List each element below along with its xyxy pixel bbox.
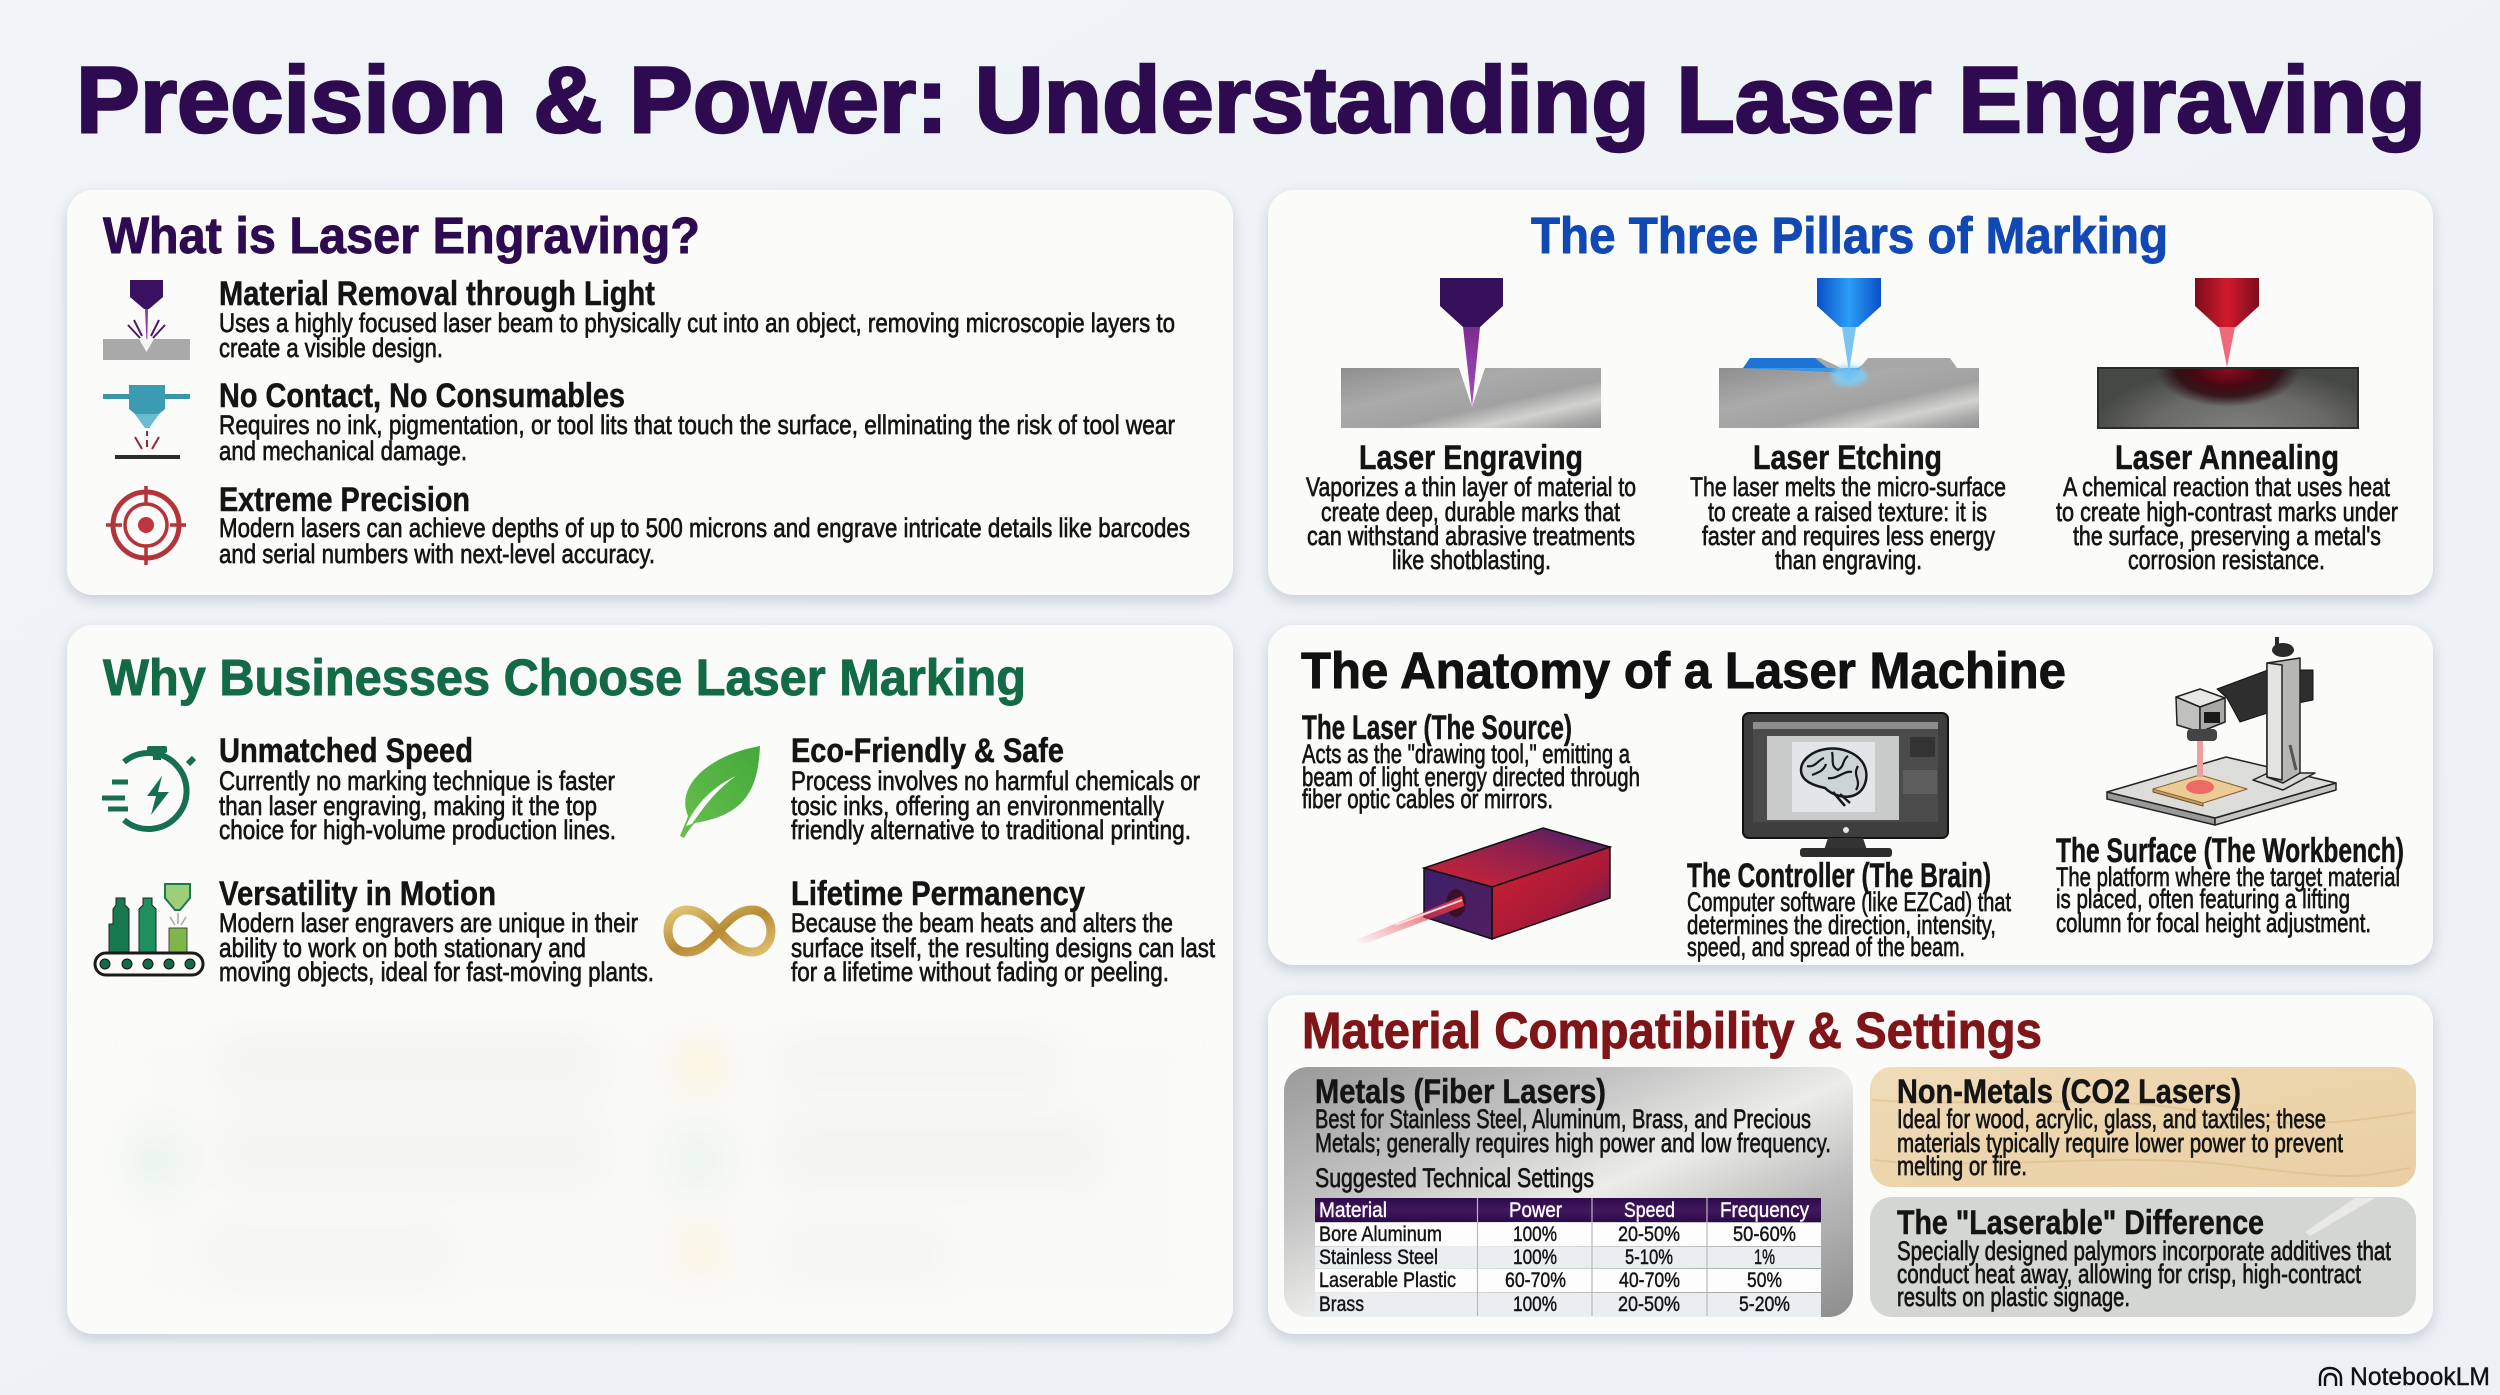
text: lifetime permanency — [791, 875, 1216, 987]
logo: NotebookLM: NotebookLM — [2350, 1363, 2490, 1391]
text: lifetime permanency: for a lifetime without fading or peeling. — [791, 957, 1169, 987]
text: versatility: moving objects, ideal for fast-moving plants. — [219, 957, 654, 987]
card: non-metals: Non-Metals (CO2 Lasers) — [1897, 1073, 2241, 1111]
text: laser etching: faster and requires less energy — [1702, 521, 1996, 551]
text: lifetime permanency: Because the beam heats and alters the — [791, 908, 1173, 938]
table: technical settings: 60-70% — [1505, 1269, 1566, 1292]
text: eco-friendly: tosic inks, offering an environmentally — [791, 791, 1165, 821]
text: versatility: Modern laser engravers are unique in their — [219, 908, 638, 938]
card: non-metals: Ideal for wood, acrylic, glass, and taxtiles; these — [1897, 1104, 2326, 1134]
text: laser etching: than engraving. — [1775, 545, 1922, 575]
text: metals description: Metals (Fiber Lasers) — [1315, 1073, 1606, 1111]
icon: laser source box — [1356, 828, 1610, 945]
panel: what is laser engraving — [67, 190, 1233, 595]
text: versatility — [219, 875, 654, 987]
text: eco-friendly — [791, 732, 1200, 845]
text: extreme precision: and serial numbers with next-level accuracy. — [219, 539, 655, 569]
text: unmatched speed: choice for high-volume production lines. — [219, 815, 616, 845]
card: non-metals — [1870, 1067, 2416, 1187]
panel: three pillars — [1268, 190, 2433, 595]
table: technical settings: 50-60% — [1733, 1223, 1796, 1246]
card: non-metals: melting or fire. — [1897, 1151, 2027, 1181]
text: the controller: The Controller (The Brain) — [1687, 857, 1991, 895]
text: the laser source: Acts as the "drawing tool," emitting a — [1302, 739, 1630, 769]
text: lifetime permanency: Lifetime Permanency — [791, 875, 1085, 913]
table: technical settings: Speed — [1624, 1199, 1675, 1222]
diagram: laser engraving — [1341, 278, 1601, 428]
table: technical settings: 20-50% — [1618, 1223, 1680, 1246]
text: no contact: No Contact, No Consumables — [219, 377, 625, 415]
icon: conveyor with bottles — [95, 884, 203, 975]
text: laser annealing: the surface, preserving a metal's — [2073, 521, 2381, 551]
text: laser annealing: to create high-contrast marks under — [2056, 497, 2398, 527]
icon: laser cutting material — [103, 280, 190, 360]
text: extreme precision: Modern lasers can achieve depths of up to 500 microns and engrave intricate details like barcodes — [219, 513, 1190, 543]
table: technical settings: Frequency — [1720, 1199, 1809, 1222]
text: unmatched speed: Currently no marking technique is faster — [219, 766, 615, 796]
card: laserable difference: results on plastic signage. — [1897, 1282, 2130, 1312]
text: the surface: column for focal height adjustment. — [2056, 908, 2371, 938]
text: lifetime permanency: surface itself, the resulting designs can last — [791, 933, 1216, 963]
text: the laser source: fiber optic cables or mirrors. — [1302, 784, 1553, 814]
text: the controller: determines the direction, intensity, — [1687, 910, 1996, 940]
table: technical settings: Brass — [1319, 1293, 1364, 1316]
title: Precision & Power: Understanding Laser Engraving — [76, 47, 2426, 152]
table: technical settings: Power — [1509, 1199, 1562, 1222]
icon: laser machine workbench — [2107, 637, 2336, 825]
text: the surface: The platform where the target material — [2056, 862, 2400, 892]
table: technical settings: 20-50% — [1618, 1293, 1680, 1316]
text: laser engraving — [1306, 439, 1636, 575]
text: laser annealing: A chemical reaction that uses heat — [2063, 472, 2391, 502]
text: laser etching: to create a raised texture: it is — [1708, 497, 1987, 527]
text: eco-friendly: friendly alternative to traditional printing. — [791, 815, 1191, 845]
text: laser annealing: Laser Annealing — [2115, 439, 2339, 477]
text: eco-friendly: Eco-Friendly & Safe — [791, 732, 1064, 770]
text: laser annealing — [2056, 439, 2398, 575]
text: the laser source: The Laser (The Source) — [1302, 709, 1572, 747]
diagram: laser etching — [1719, 278, 1979, 428]
panel: material compatibility — [1268, 995, 2433, 1334]
text: the surface — [2056, 832, 2404, 938]
text: metals description: Metals; generally requires high power and low frequency. — [1315, 1128, 1831, 1158]
text: eco-friendly: Process involves no harmful chemicals or — [791, 766, 1200, 796]
panel: anatomy of a laser machine — [1268, 625, 2433, 965]
panel: why businesses choose — [67, 625, 1233, 1334]
table: technical settings: 40-70% — [1619, 1269, 1680, 1292]
text: laser etching — [1690, 439, 2006, 575]
heading: why businesses: Why Businesses Choose Laser Marking — [103, 649, 1026, 706]
text: extreme precision: Extreme Precision — [219, 481, 470, 519]
text: laser engraving: Vaporizes a thin layer of material to — [1306, 472, 1636, 502]
text: laser etching: Laser Etching — [1753, 439, 1942, 477]
card: laserable difference — [1870, 1197, 2416, 1317]
heading: material compatibility: Material Compatibility & Settings — [1302, 1002, 2042, 1059]
table: technical settings: 5-10% — [1625, 1246, 1673, 1269]
table: technical settings: Bore Aluminum — [1319, 1223, 1442, 1246]
card: metals — [1284, 1067, 1853, 1317]
text: laser etching: The laser melts the micro-surface — [1690, 472, 2006, 502]
text: metals description: Suggested Technical Settings — [1315, 1163, 1594, 1193]
text: versatility: Versatility in Motion — [219, 875, 496, 913]
table: technical settings: Material — [1319, 1199, 1387, 1222]
text: laser engraving: like shotblasting. — [1392, 545, 1551, 575]
heading: what is laser engraving: What is Laser Engraving? — [103, 207, 700, 264]
text: the controller: Computer software (like EZCad) that — [1687, 887, 2011, 917]
card: non-metals: materials typically require lower power to prevent — [1897, 1128, 2343, 1158]
table: technical settings: Laserable Plastic — [1319, 1269, 1456, 1292]
text: extreme precision — [219, 481, 1190, 569]
text: unmatched speed: than laser engraving, making it the top — [219, 791, 597, 821]
diagram: laser annealing — [2098, 278, 2358, 428]
text: unmatched speed — [219, 732, 616, 845]
icon: infinity — [668, 910, 771, 952]
text: the laser source: beam of light energy directed through — [1302, 762, 1640, 792]
text: the laser source — [1302, 709, 1640, 814]
text: metals description — [1315, 1073, 1831, 1193]
text: material removal: Material Removal through Light — [219, 275, 655, 313]
text: the controller — [1687, 857, 2011, 962]
text: material removal — [219, 275, 1175, 363]
text: laser engraving: can withstand abrasive treatments — [1307, 521, 1635, 551]
text: material removal: create a visible design. — [219, 333, 443, 363]
text: material removal: Uses a highly focused laser beam to physically cut into an object, removing microscopie layers to — [219, 308, 1175, 338]
card: laserable difference: The "Laserable" Difference — [1897, 1204, 2264, 1242]
table: technical settings: 100% — [1513, 1293, 1557, 1316]
table: technical settings: 50% — [1747, 1269, 1782, 1292]
text: laser engraving: Laser Engraving — [1359, 439, 1583, 477]
text: unmatched speed: Unmatched Speed — [219, 732, 473, 770]
heading: three pillars: The Three Pillars of Marking — [1531, 207, 2168, 264]
text: the surface: is placed, often featuring a lifting — [2056, 884, 2350, 914]
table: technical settings: Stainless Steel — [1319, 1246, 1438, 1269]
icon: target — [106, 486, 186, 565]
text: no contact: Requires no ink, pigmentation, or tool lits that touch the surface, ellminating the risk of tool wear — [219, 410, 1175, 440]
text: laser annealing: corrosion resistance. — [2128, 545, 2325, 575]
blurred area: faded lower content — [130, 1025, 1190, 1310]
text: no contact: and mechanical damage. — [219, 436, 467, 466]
table: technical settings: 100% — [1513, 1246, 1557, 1269]
icon: stopwatch — [102, 746, 194, 829]
text: metals description: Best for Stainless Steel, Aluminum, Brass, and Precious — [1315, 1104, 1811, 1134]
text: the controller: speed, and spread of the beam. — [1687, 932, 1965, 962]
text: versatility: ability to work on both stationary and — [219, 933, 586, 963]
icon: no contact nozzle — [103, 385, 190, 459]
card: laserable difference: conduct heat away, allowing for crisp, high-contract — [1897, 1259, 2361, 1289]
icon: leaf — [680, 746, 760, 838]
heading: anatomy: The Anatomy of a Laser Machine — [1301, 642, 2066, 699]
table: technical settings: 5-20% — [1739, 1293, 1790, 1316]
table: technical settings: 1% — [1754, 1246, 1775, 1269]
table: technical settings: 100% — [1513, 1223, 1557, 1246]
icon: monitor with brain — [1743, 713, 1948, 857]
text: laser engraving: create deep, durable marks that — [1321, 497, 1620, 527]
text: no contact — [219, 377, 1175, 466]
table: technical settings — [1315, 1198, 1821, 1317]
